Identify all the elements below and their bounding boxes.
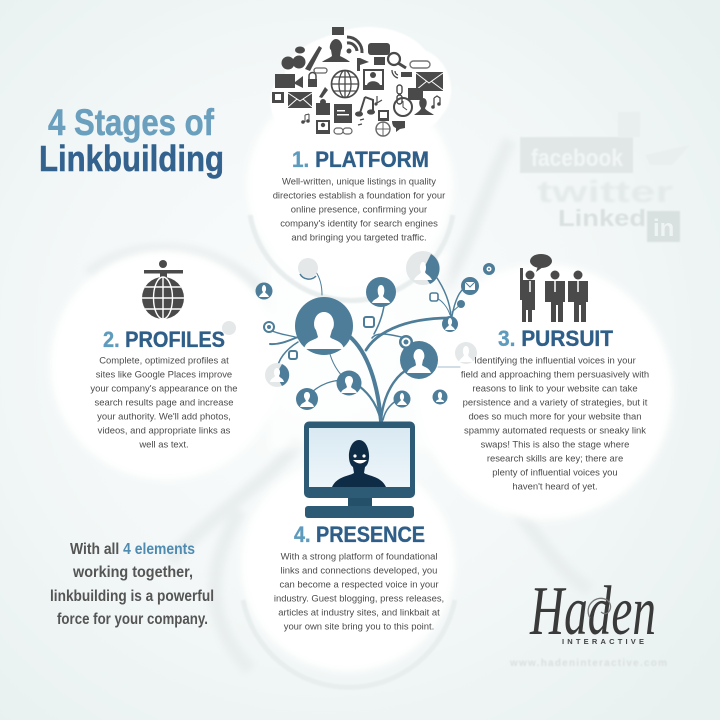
- closing statement: linkbuilding is a powerful: [50, 588, 214, 605]
- profiles description: videos, and appropriate links as: [98, 426, 231, 436]
- profile nodes: [256, 263, 495, 410]
- platform description: directories establish a foundation for your: [273, 190, 445, 202]
- cloud shape: [270, 27, 451, 142]
- pursuit description: research skills are key; there are: [487, 454, 623, 464]
- pursuit description: swaps! This is also the stage where: [481, 440, 629, 450]
- presence description: articles at industry sites, and linkbait at: [278, 608, 440, 618]
- presence description: [274, 552, 444, 632]
- social media logos: twitter: [537, 174, 673, 209]
- panel: presence: [274, 522, 444, 632]
- pursuit description: Identifying the influential voices in your: [474, 356, 636, 366]
- presence description: With a strong platform of foundational: [281, 552, 437, 562]
- pursuit description: plenty of influential voices you: [492, 468, 618, 478]
- pursuit description: spammy automated requests or sneaky link: [464, 426, 646, 436]
- pursuit description: persistence and a variety of strategies, but it: [463, 398, 648, 408]
- faint circle ring: [243, 215, 455, 687]
- presence description: links and connections developed, you: [281, 566, 437, 576]
- title: 4 Stages of: [48, 102, 215, 143]
- media icons: [272, 27, 443, 136]
- pursuit description: does so much more for your website than: [468, 412, 642, 422]
- social media logos: in: [653, 215, 674, 242]
- profiles description: search results page and increase: [94, 398, 234, 408]
- profiles description: Complete, optimized profiles at: [99, 356, 229, 366]
- profiles description: your authority. We'll add photos,: [97, 412, 231, 422]
- presence description: your own site bring you to this point.: [284, 622, 434, 632]
- icon: three businessmen: [520, 254, 588, 322]
- closing statement: working together,: [72, 564, 193, 581]
- profiles description: well as text.: [138, 440, 189, 450]
- heading: profiles: 2. PROFILES: [103, 327, 225, 352]
- platform description: [273, 176, 445, 244]
- title: Linkbuilding: [39, 138, 224, 179]
- heading: presence: 4. PRESENCE: [294, 522, 425, 547]
- profiles description: [90, 356, 238, 450]
- profile silhouettes: [259, 262, 473, 407]
- panel: profiles: [90, 260, 238, 450]
- closing statement: [50, 541, 214, 628]
- logo: Haden Interactive: [509, 573, 667, 669]
- panel: platform: [273, 147, 445, 244]
- panel: pursuit: [461, 254, 649, 492]
- heading: pursuit: 3. PURSUIT: [498, 326, 614, 351]
- presence description: can become a respected voice in your: [280, 580, 438, 590]
- platform description: Well-written, unique listings in quality: [282, 176, 436, 188]
- profiles description: your company's appearance on the: [90, 384, 238, 394]
- platform description: and bringing you targeted traffic.: [291, 232, 427, 244]
- circle panels: [50, 82, 673, 672]
- closing statement: With all 4 elements: [70, 541, 195, 558]
- decorative swirls: [90, 140, 590, 670]
- pursuit description: [461, 356, 649, 492]
- social media logos: [520, 112, 690, 242]
- faded nodes: [222, 251, 477, 387]
- small mail, target and bubble nodes: [263, 266, 492, 359]
- logo: Haden Interactive: Haden: [529, 573, 656, 650]
- icon: monitor: [304, 422, 415, 518]
- pursuit description: reasons to link to your website can take: [472, 384, 638, 394]
- title: [39, 102, 224, 179]
- person on screen: [332, 440, 386, 487]
- network tree: [222, 251, 495, 421]
- logo: Haden Interactive: INTERACTIVE: [562, 637, 644, 646]
- pursuit description: haven't heard of yet.: [512, 482, 598, 492]
- platform description: online presence, confirming your: [291, 204, 427, 216]
- social media logos: facebook: [531, 145, 624, 172]
- logo: Haden Interactive: www.hadeninteractive.com: [509, 658, 667, 669]
- platform description: company's identity for search engines: [280, 218, 438, 230]
- branches: [270, 272, 466, 421]
- pursuit description: field and approaching them persuasively with: [461, 370, 649, 380]
- closing statement: force for your company.: [57, 611, 208, 628]
- heading: platform: 1. PLATFORM: [292, 147, 429, 172]
- cloud of media icons: [270, 27, 451, 142]
- icon: globe with figure: [142, 260, 184, 319]
- profiles description: sites like Google Places improve: [96, 370, 232, 380]
- presence description: industry. Guest blogging, press releases,: [274, 594, 444, 604]
- social media logos: Linked: [558, 205, 646, 231]
